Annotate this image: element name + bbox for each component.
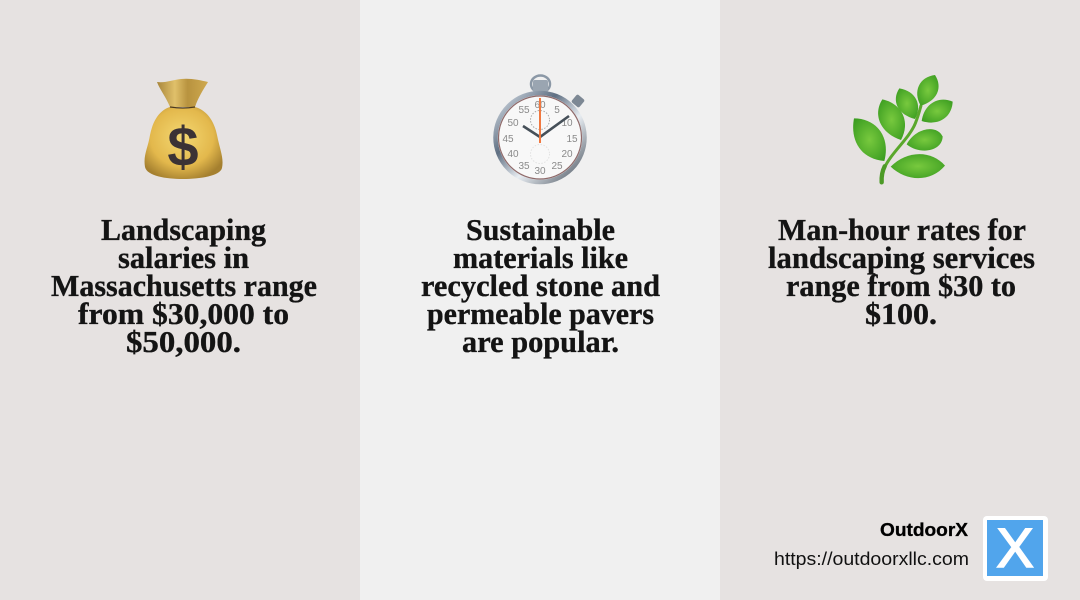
icon: stopwatch: 10 xyxy=(561,118,573,129)
icon: stopwatch: 60 xyxy=(534,100,546,111)
icon: stopwatch: 45 xyxy=(502,134,514,145)
icon: stopwatch: 30 xyxy=(534,166,546,177)
icon: stopwatch: 55 xyxy=(518,105,530,116)
heading: salaries text: Massachusetts range xyxy=(51,268,317,303)
heading: materials text xyxy=(421,212,660,359)
icon: stopwatch: 20 xyxy=(561,149,573,160)
icon: money bag xyxy=(145,79,223,179)
heading: salaries text: Landscaping xyxy=(101,212,266,247)
website url: https://outdoorxllc.com xyxy=(774,549,969,569)
heading: materials text: recycled stone and xyxy=(421,268,660,303)
icon: stopwatch: 15 xyxy=(566,134,578,145)
heading: salaries text xyxy=(51,212,317,359)
icon: stopwatch: 5 xyxy=(554,105,560,116)
panel: materials xyxy=(360,0,720,600)
heading: materials text: permeable pavers xyxy=(427,296,654,331)
panel: rates xyxy=(720,0,1080,600)
heading: rates text: landscaping services xyxy=(768,240,1035,275)
icon: stopwatch: 40 xyxy=(507,149,519,160)
icon: stopwatch: 50 xyxy=(507,118,519,129)
heading: salaries text: from $30,000 to xyxy=(78,296,289,331)
heading: rates text: range from $30 to xyxy=(786,268,1016,303)
heading: materials text: materials like xyxy=(453,240,628,275)
heading: salaries text: salaries in xyxy=(118,240,249,275)
heading: salaries text: $50,000. xyxy=(126,324,241,359)
brand name: OutdoorX xyxy=(880,520,968,540)
heading: rates text: $100. xyxy=(865,296,937,331)
logo xyxy=(983,516,1048,581)
icon: stopwatch xyxy=(496,76,585,182)
icon: herb xyxy=(853,75,953,182)
panel: salaries xyxy=(0,0,360,600)
icon: money bag: $ xyxy=(167,115,199,178)
heading: materials text: Sustainable xyxy=(466,212,615,247)
icon: stopwatch: 25 xyxy=(551,161,563,172)
heading: rates text xyxy=(768,212,1035,331)
icon: stopwatch: 35 xyxy=(518,161,530,172)
logo: X xyxy=(996,516,1034,579)
heading: materials text: are popular. xyxy=(462,324,619,359)
heading: rates text: Man-hour rates for xyxy=(778,212,1026,247)
